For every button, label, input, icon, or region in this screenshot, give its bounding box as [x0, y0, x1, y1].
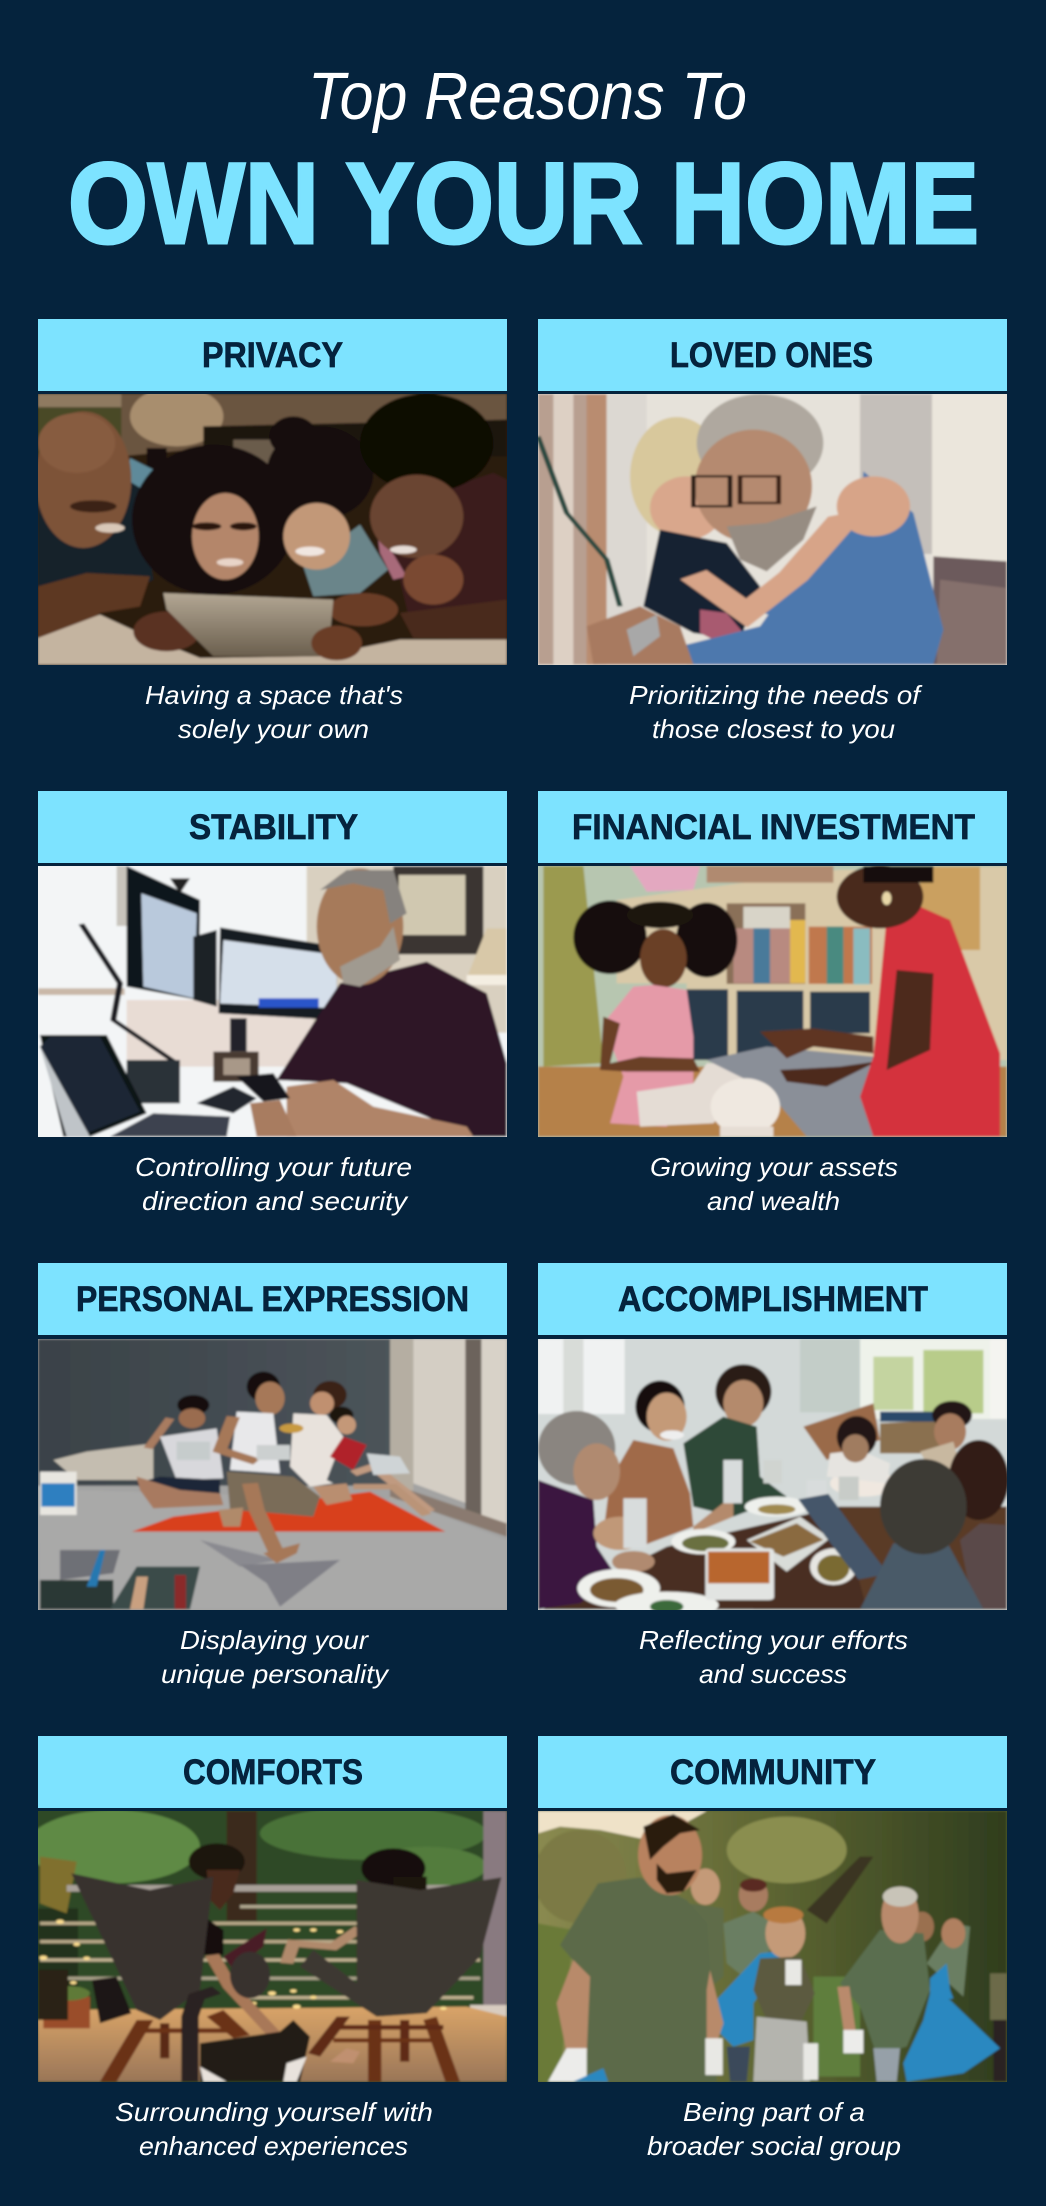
photo: mother and daughter with a piggy bank — [538, 866, 1007, 1137]
heading: comforts: COMFORTS — [183, 1753, 363, 1792]
heading: personal expression — [38, 1263, 507, 1335]
heading: financial investment — [538, 791, 1007, 863]
caption: financial investment: and wealth — [707, 1186, 840, 1216]
heading: personal expression: PERSONAL EXPRESSION — [76, 1280, 469, 1319]
caption: loved ones — [629, 680, 923, 744]
panel: loved ones — [518, 319, 1027, 744]
heading: stability: STABILITY — [189, 808, 358, 847]
title — [68, 59, 979, 268]
photo: man using phone at a desk with monitors — [38, 866, 507, 1137]
photo: couple in wicker chairs on a lit porch with a cat — [38, 1811, 507, 2082]
heading: community: COMMUNITY — [670, 1753, 876, 1792]
caption: comforts: Surrounding yourself with — [115, 2097, 433, 2127]
panel: accomplishment — [518, 1263, 1027, 1689]
heading: comforts — [38, 1736, 507, 1808]
caption: personal expression: Displaying your — [180, 1625, 369, 1655]
panel: community — [518, 1736, 1027, 2161]
caption: accomplishment: and success — [699, 1659, 847, 1689]
caption: loved ones: Prioritizing the needs of — [629, 680, 923, 710]
panel: stability — [18, 791, 527, 1216]
caption: privacy — [145, 680, 403, 744]
title line 1: Top Reasons To — [308, 59, 747, 134]
photo: family looking at a tablet in bed — [38, 394, 507, 665]
caption: stability: Controlling your future — [135, 1152, 412, 1182]
heading: accomplishment — [538, 1263, 1007, 1335]
photo: friends sharing dinner around a table — [538, 1339, 1007, 1610]
caption: stability: direction and security — [142, 1186, 409, 1216]
panel: privacy — [18, 319, 527, 744]
panel: comforts — [18, 1736, 527, 2161]
caption: personal expression — [161, 1625, 390, 1689]
caption: comforts — [115, 2097, 433, 2161]
panel: personal expression — [18, 1263, 527, 1689]
caption: community: Being part of a — [683, 2097, 865, 2127]
caption: community: broader social group — [647, 2131, 901, 2161]
caption: personal expression: unique personality — [161, 1659, 390, 1689]
heading: privacy — [38, 319, 507, 391]
panel: financial investment — [518, 791, 1027, 1216]
heading: stability — [38, 791, 507, 863]
caption: privacy: solely your own — [178, 714, 369, 744]
caption: financial investment — [650, 1152, 898, 1216]
caption: stability — [135, 1152, 412, 1216]
caption: comforts: enhanced experiences — [139, 2131, 408, 2161]
heading: loved ones: LOVED ONES — [670, 336, 873, 375]
heading: accomplishment: ACCOMPLISHMENT — [618, 1280, 928, 1319]
photo: grandfather hugging grandchild — [538, 394, 1007, 665]
photo: family eating on the floor of a room being renovated — [38, 1339, 507, 1610]
caption: privacy: Having a space that's — [145, 680, 403, 710]
heading: loved ones — [538, 319, 1007, 391]
heading: privacy: PRIVACY — [202, 336, 343, 375]
caption: financial investment: Growing your assets — [650, 1152, 898, 1182]
heading: financial investment: FINANCIAL INVESTMENT — [572, 808, 975, 847]
caption: accomplishment: Reflecting your efforts — [639, 1625, 908, 1655]
caption: loved ones: those closest to you — [652, 714, 895, 744]
caption: accomplishment — [639, 1625, 908, 1689]
heading: community — [538, 1736, 1007, 1808]
photo: volunteers collecting litter in a park — [538, 1811, 1007, 2082]
caption: community — [647, 2097, 901, 2161]
